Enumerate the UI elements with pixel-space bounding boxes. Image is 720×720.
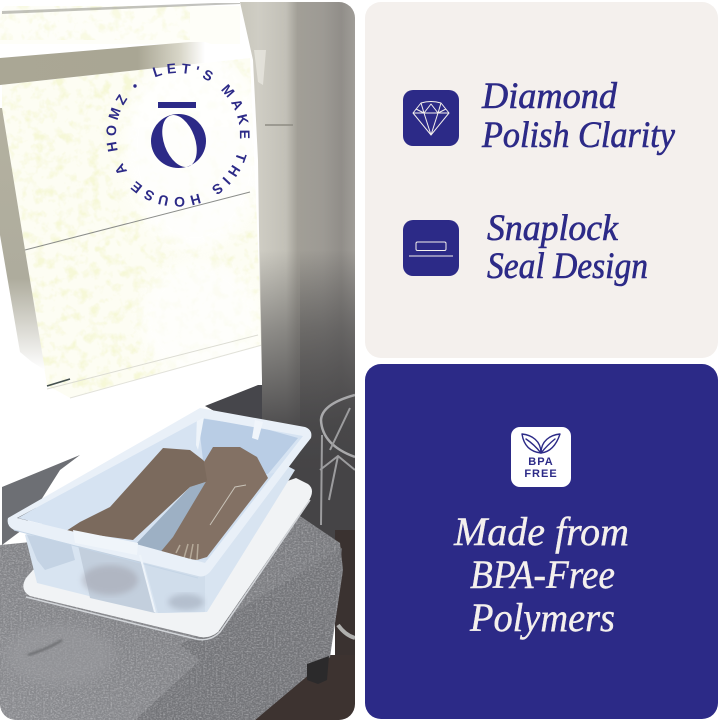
bin interior [18,418,303,524]
window sill and wall [2,385,262,545]
heading: made from BPA-free polymers: Made from [453,509,629,554]
panel: features [365,2,718,358]
icon: diamond [403,90,459,146]
heading: snaplock seal design: Snaplock [487,208,619,249]
circular slogan: LET'S MAKE THIS HOUSE A HOMZ [106,63,250,207]
icon: BPA free leaves: FREE [524,468,558,480]
panel: product photo [0,2,355,720]
curtain [240,2,355,540]
window frame [0,42,262,398]
heading: made from BPA-free polymers [453,509,629,640]
panel: BPA-free [365,364,718,719]
side table and floor [255,395,355,720]
icon: BPA free leaves: BPA [528,456,554,468]
icon: BPA free leaves [511,427,571,487]
boots [63,447,268,560]
heading: diamond polish clarity [481,76,676,156]
icon: snaplock seal [403,220,459,276]
bin rim [8,408,311,576]
logo mark [151,102,206,168]
window glass with foliage [0,2,265,402]
heading: diamond polish clarity: Diamond [481,76,617,117]
heading: snaplock seal design: Seal Design [487,246,648,287]
storage bin [8,408,311,613]
heading: made from BPA-free polymers: Polymers [469,595,615,640]
plastic lid [23,478,312,640]
brand logo badge [106,63,250,207]
ottoman [0,510,355,720]
heading: diamond polish clarity: Polish Clarity [481,115,676,156]
heading: made from BPA-free polymers: BPA-Free [470,552,615,597]
heading: snaplock seal design [487,208,648,287]
